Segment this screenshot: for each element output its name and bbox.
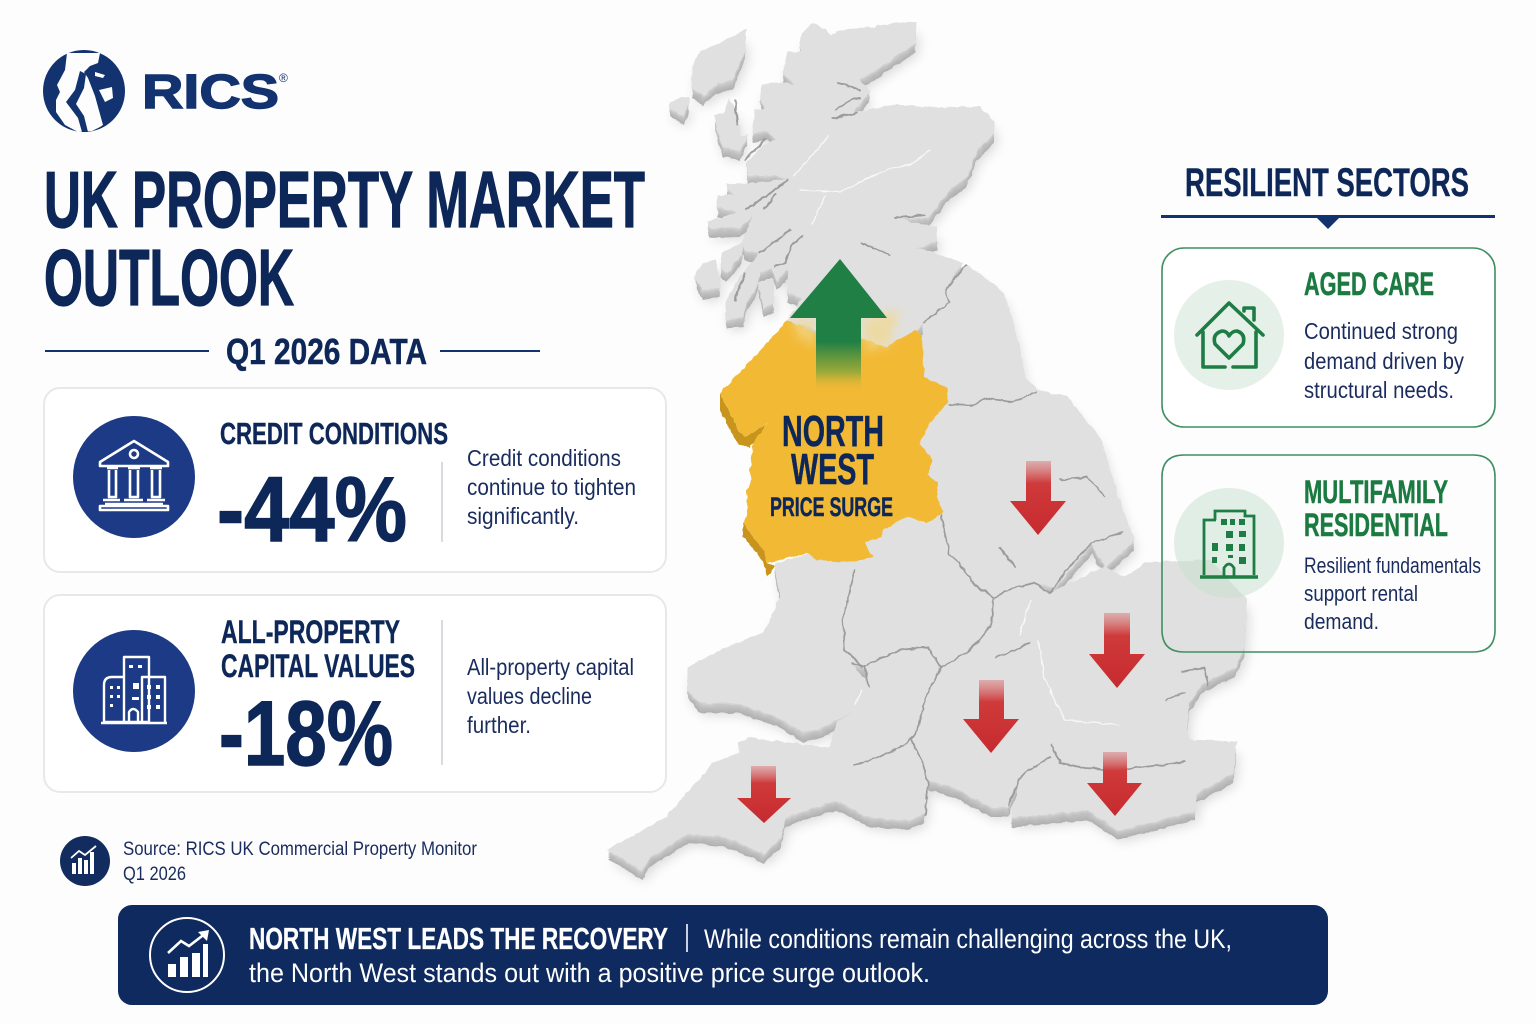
region: Yorkshire and East Midlands <box>910 390 1134 598</box>
heading: AGED CARE <box>1304 266 1434 302</box>
yellow fade at top of North West <box>790 310 900 352</box>
description <box>467 654 634 738</box>
description: values decline <box>467 683 592 709</box>
arrow: red down Yorkshire <box>1010 461 1066 535</box>
subtitle: Q1 2026 data: Q1 2026 DATA <box>226 331 427 372</box>
region: Scotland <box>708 22 994 347</box>
metric: -44% <box>217 459 407 561</box>
description: Continued strong <box>1304 318 1458 344</box>
label: North West price surge: PRICE SURGE <box>770 492 893 522</box>
icon: bank <box>73 416 195 538</box>
island: Skye <box>715 100 747 150</box>
description <box>1304 318 1464 403</box>
heading: CREDIT CONDITIONS <box>220 416 448 451</box>
description: support rental <box>1304 581 1418 606</box>
heading: CAPITAL VALUES <box>221 648 415 684</box>
region: Dorset <box>827 740 928 820</box>
title: UK PROPERTY MARKET <box>44 155 645 244</box>
white highlights on map <box>793 135 1120 725</box>
description: Resilient fundamentals <box>1304 553 1481 578</box>
icon: buildings <box>73 630 195 752</box>
source note <box>60 836 478 886</box>
banner text: While conditions remain challenging across the UK, <box>704 924 1232 954</box>
island: Lewis and Harris <box>692 30 745 95</box>
region: North East England <box>922 265 1036 405</box>
description: further. <box>467 712 531 738</box>
arrow: red down South West <box>737 766 791 823</box>
title: OUTLOOK <box>44 233 294 322</box>
land regions <box>608 22 1246 870</box>
panel: capital values <box>44 595 666 792</box>
region: West Midlands <box>842 505 994 667</box>
label: North West price surge <box>770 407 893 522</box>
banner text <box>249 924 1232 988</box>
title <box>44 155 645 322</box>
island: Arran <box>758 280 774 307</box>
icon: rising chart <box>150 918 224 992</box>
panel: credit conditions <box>44 388 666 572</box>
panel: multifamily residential <box>1162 455 1495 652</box>
map of the UK <box>608 22 1249 882</box>
source text <box>123 839 478 885</box>
icon: source chart <box>60 836 110 886</box>
region: East Midlands south <box>985 583 1050 657</box>
description: Credit conditions <box>467 445 621 471</box>
banner text: the North West stands out with a positive price surge outlook. <box>249 958 930 988</box>
registered mark: ® <box>279 71 288 85</box>
region: Severn and Gloucestershire <box>829 647 941 760</box>
heading <box>1304 474 1448 543</box>
label: North West price surge: WEST <box>791 445 874 494</box>
region: South East England <box>1012 717 1236 830</box>
label: North West price surge: NORTH <box>782 407 884 456</box>
metric: -18% <box>219 683 393 785</box>
island: Islay <box>695 260 720 290</box>
description: demand driven by <box>1304 348 1464 374</box>
region: North West highlighted <box>720 320 948 577</box>
heading: MULTIFAMILY <box>1304 474 1448 510</box>
source text: Q1 2026 <box>123 864 186 885</box>
arrow: red down East of England <box>1089 613 1145 688</box>
description: continue to tighten <box>467 474 636 500</box>
logo: RICS <box>43 50 288 132</box>
sea lochs <box>735 83 1015 567</box>
region: East of England <box>1033 560 1246 730</box>
description <box>467 445 636 529</box>
icon: house with heart <box>1174 280 1284 390</box>
description: demand. <box>1304 609 1379 634</box>
icon: lion crest <box>43 50 125 132</box>
region: Wales <box>688 550 869 732</box>
description: All-property capital <box>467 654 634 680</box>
description <box>1304 553 1481 634</box>
arrow: red down South Central <box>963 680 1019 753</box>
description: structural needs. <box>1304 377 1454 403</box>
region: South Central England <box>911 627 1063 807</box>
heading: RESIDENTIAL <box>1304 507 1448 543</box>
source text: Source: RICS UK Commercial Property Monitor <box>123 839 478 860</box>
region: Devon and Cornwall <box>608 738 836 870</box>
banner: North West leads the recovery <box>118 905 1328 1005</box>
island: Uist <box>670 97 689 115</box>
heading: ALL-PROPERTY <box>221 614 400 650</box>
logo wordmark: RICS <box>142 66 279 119</box>
resilient sectors heading <box>1161 161 1495 229</box>
heading <box>221 614 415 684</box>
description: significantly. <box>467 503 579 529</box>
banner heading: NORTH WEST LEADS THE RECOVERY <box>249 921 668 956</box>
border cracks <box>843 265 1208 815</box>
arrow: red down South East <box>1087 752 1142 816</box>
island: Jura <box>720 242 743 272</box>
panel: aged care <box>1162 248 1495 427</box>
arrow: green up over North West <box>790 259 887 392</box>
icon: apartment building <box>1174 488 1284 598</box>
